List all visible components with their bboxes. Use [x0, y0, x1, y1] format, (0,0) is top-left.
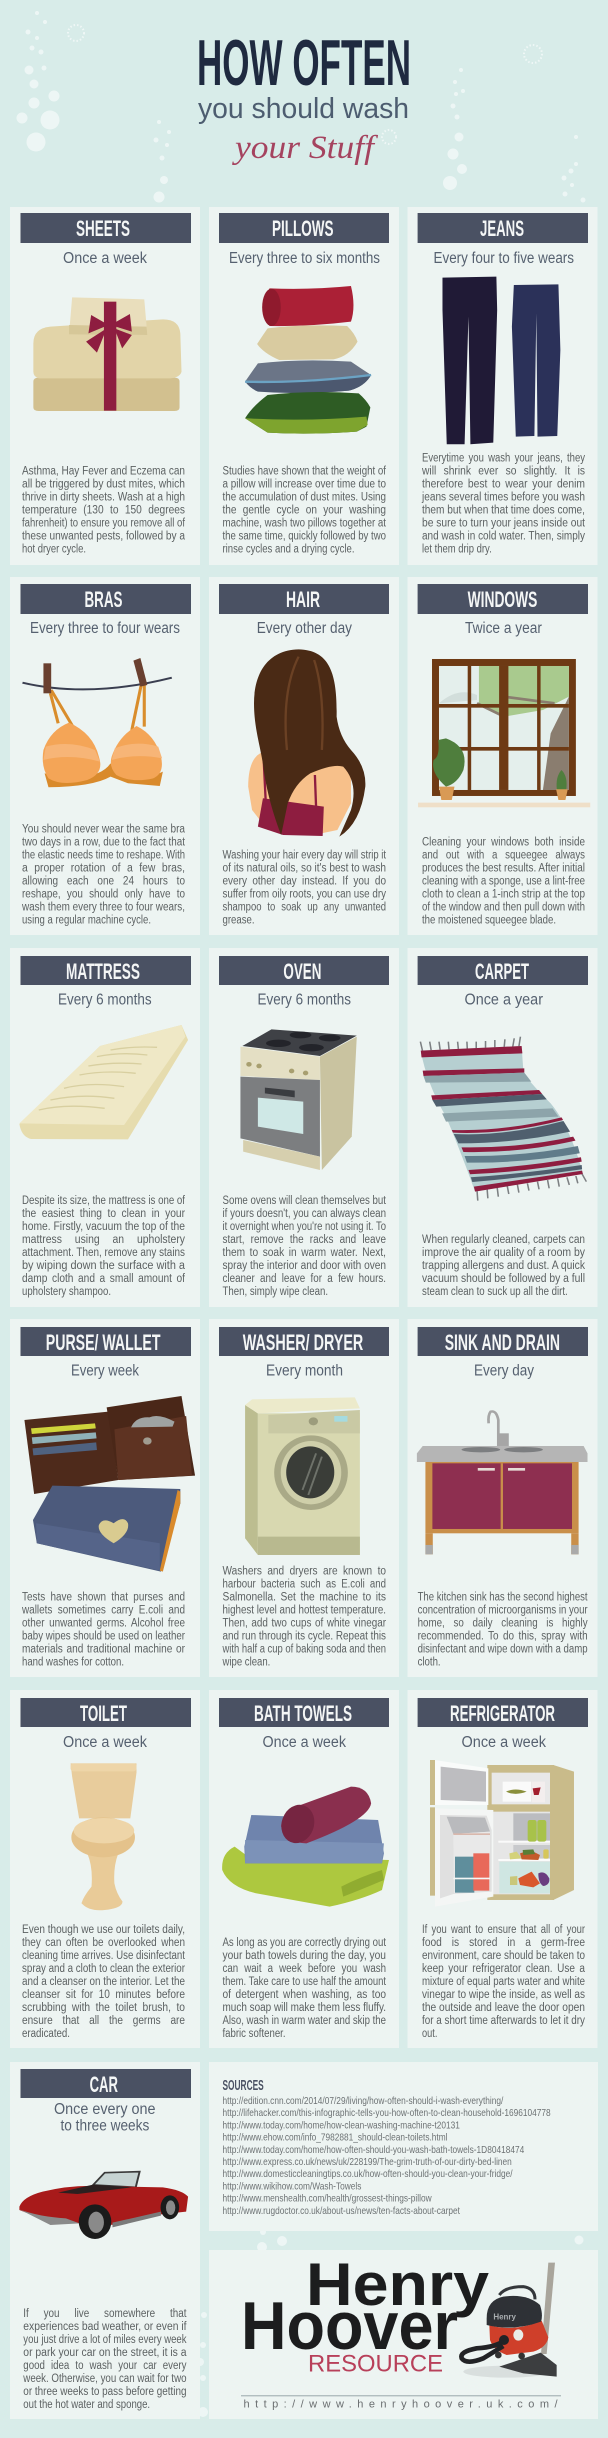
body text: oven: it overnight when you're not using it. To [222, 1221, 386, 1233]
heading: sources: SOURCES [222, 2078, 264, 2094]
body text: toilet: and a cleanser on the interior. Let the [22, 1976, 185, 1988]
header: windows [418, 584, 588, 614]
body text: oven: Then, simply wipe clean. [222, 1286, 328, 1298]
icon: toilet [71, 1763, 137, 1910]
body text: car [22, 2308, 187, 2411]
icon: stacked towels [222, 1787, 389, 1907]
panel: hair [209, 577, 399, 935]
body text: sheets: thrive in dirty sheets. Wash at a high [22, 492, 185, 504]
source list: http://www.menshealth.com/health/grossest-things-pillow [222, 2194, 432, 2205]
source list: http://www.domesticcleaningtips.co.uk/how-often-should-you-clean-your-fridge/ [222, 2169, 513, 2180]
source list: http://www.today.com/home/how-often-should-you-wash-bath-towels-1D80418474 [222, 2145, 524, 2156]
panel: jeans [408, 207, 598, 565]
body text: carpet: When regularly cleaned, carpets can [422, 1234, 585, 1246]
frequency: oven: Every 6 months [258, 992, 351, 1009]
icon: jeans [442, 277, 560, 444]
header: toilet: TOILET [80, 1701, 127, 1726]
body text: oven: cleaner and leave for a few hours. [222, 1273, 386, 1285]
body text: washer and dryer: and run through its cycle. Repeat this [222, 1630, 386, 1642]
panel: bath towels [209, 1690, 399, 2048]
icon: woman with long hair [248, 649, 365, 837]
header: washer and dryer: WASHER/ DRYER [243, 1330, 363, 1355]
body text: bras: using a regular machine cycle. [22, 914, 151, 926]
body text: bras: two days in a row, due to the fact that [22, 836, 186, 848]
body text: pillows: the gentle cycle on your washing [222, 505, 386, 517]
body text: car: experiences bad weather, or even if [23, 2321, 187, 2333]
header: sink and drain [418, 1327, 588, 1356]
body text: purse and wallet: hand washes for cotton. [22, 1656, 124, 1668]
body text: jeans: be sure to turn your jeans inside out [422, 518, 586, 530]
body text: bras: wash them every three to four wears, [21, 902, 185, 914]
frequency: bath towels: Once a week [262, 1734, 346, 1751]
body text: bath towels [222, 1937, 387, 2040]
body text: oven [222, 1195, 387, 1298]
body text: sheets: these unwanted pests, followed by a [22, 531, 186, 543]
frequency: bras: Every three to four wears [30, 620, 180, 637]
body text: mattress: attachment. Then, remove any stains [22, 1247, 185, 1259]
body text: jeans [421, 453, 586, 556]
body text: sheets: temperature (130 to 150 degrees [22, 505, 185, 517]
header: hair [219, 584, 389, 614]
header: bras [20, 584, 191, 614]
body text: toilet: eradicated. [22, 2028, 70, 2040]
icon: bra on line [22, 658, 172, 787]
header: carpet: CARPET [475, 959, 529, 984]
header: mattress [20, 956, 191, 985]
header: bras: BRAS [84, 587, 122, 612]
body text: jeans: let them drip dry. [422, 544, 492, 556]
body text: hair: of its natural oils, so it's best to wash [222, 862, 386, 874]
body text: purse and wallet: wallets sometimes carry E.coli and [21, 1604, 185, 1616]
body text: sheets: fahrenheit) to ensure you remove all of [22, 518, 186, 530]
body text: sheets [22, 466, 186, 556]
panel: refrigerator [408, 1690, 598, 2048]
body text: mattress: by wiping down the surface with a [22, 1260, 186, 1272]
body text: hair: every other day instead. If you do [222, 876, 386, 888]
body text: sink and drain [418, 1592, 588, 1668]
body text: bras: a proper rotation of a few bras, [22, 862, 185, 874]
body text: refrigerator: keep your refrigerator clean. Use a [422, 1963, 586, 1975]
header: refrigerator [418, 1698, 588, 1727]
body text: toilet: cleaning time arrives. Use disinfectant [22, 1950, 186, 1962]
body text: refrigerator: for a short time afterwards to let it dry [422, 2015, 585, 2027]
body text: pillows: the accumulation of dust mites. Using [222, 492, 386, 504]
body text: sheets: all be triggered by dust mites, which [22, 479, 185, 491]
body text: washer and dryer: wipe clean. [222, 1656, 270, 1668]
body text: car: If you live somewhere that [23, 2308, 187, 2320]
icon: red convertible [19, 2172, 188, 2239]
body text: bras: allowing each one 24 hours to [22, 876, 185, 888]
body text: washer and dryer [222, 1566, 386, 1668]
body text: carpet: steam clean to suck up all the dirt. [422, 1286, 568, 1298]
body text: refrigerator [422, 1924, 586, 2040]
body text: bath towels: your bath towels during the day, you [222, 1950, 386, 1962]
source list: http://www.express.co.uk/news/uk/228199/The-grim-truth-of-our-dirty-bed-linen [222, 2157, 512, 2168]
body text: carpet [422, 1234, 585, 1298]
body text: mattress: mattress using an upholstery [22, 1234, 185, 1246]
body text: carpet: improve the air quality of a room by [422, 1247, 585, 1259]
icon: oven [240, 1029, 357, 1170]
icon: wallet and purse [24, 1396, 195, 1572]
frequency: jeans: Every four to five wears [434, 250, 574, 267]
body text: mattress: damp cloth and a small amount of [22, 1273, 186, 1285]
header: purse and wallet [20, 1327, 191, 1356]
header: bath towels: BATH TOWELS [254, 1701, 352, 1726]
header: jeans: JEANS [480, 216, 524, 241]
body text: toilet: cleanser sit for 10 minutes before [22, 1989, 185, 2001]
source list: http://www.rugdoctor.co.uk/about-us/news/ten-facts-about-carpet [222, 2206, 460, 2217]
body text: windows: cloth to clean a 1-inch strip at the top [422, 888, 585, 900]
header: bath towels [219, 1698, 389, 1727]
header: car: CAR [90, 2072, 118, 2097]
body text: bath towels: fabric softener. [222, 2028, 286, 2040]
logo wordmark: RESOURCE [308, 2351, 443, 2378]
header: oven [219, 956, 389, 985]
body text: bath towels: much soap will make them less fluffy. [222, 2002, 386, 2014]
body text: bras: You should never wear the same bra [22, 824, 186, 836]
header: purse and wallet: PURSE/ WALLET [46, 1330, 161, 1355]
body text: pillows: a pillow will increase over time due to [222, 479, 386, 491]
body text: toilet: Even though we use our toilets daily, [22, 1924, 185, 1936]
body text: car: good idea to wash your car every [23, 2360, 187, 2372]
body text: windows: produces the best results. After initial [422, 862, 585, 874]
body text: bras: reshape, you should only have to [22, 888, 185, 900]
body text: oven: start, remove the racks and leave [222, 1234, 386, 1246]
body text: purse and wallet: Tests have shown that purses and [22, 1592, 185, 1604]
frequency: mattress: Every 6 months [58, 992, 152, 1009]
logo wordmark: Hoover [241, 2288, 458, 2364]
logo wordmark: Henry [306, 2250, 489, 2318]
panel: car [10, 2062, 200, 2419]
source list: http://www.ehow.com/info_7982881_should-clean-toilets.html [222, 2133, 448, 2144]
frequency: refrigerator: Once a week [462, 1734, 546, 1751]
body text: sheets: hot dryer cycle. [22, 544, 86, 556]
body text: pillows [222, 466, 387, 556]
frequency: car: to three weeks [60, 2118, 150, 2135]
header: sheets [20, 213, 191, 243]
frequency: hair: Every other day [257, 620, 352, 637]
body text: toilet: they can often be overlooked when [22, 1937, 185, 1949]
body text: toilet: scrubbing with the toilet brush, to [22, 2002, 185, 2014]
panel: pillows [209, 207, 399, 565]
frequency: sink and drain: Every day [474, 1363, 534, 1380]
panel: sheets [10, 207, 200, 565]
header: hair: HAIR [286, 587, 320, 612]
body text: jeans: and wash in cold water. Then, simply [422, 531, 585, 543]
body text: purse and wallet: materials and traditional machine or [22, 1644, 185, 1656]
frequency: sheets: Once a week [63, 250, 147, 267]
body text: refrigerator: food is stored in a germ-free [422, 1937, 585, 1949]
body text: jeans: will shrink ever so slightly. It is [421, 466, 585, 478]
body text: car: or three weeks to pass before getting [23, 2386, 186, 2398]
panel: windows [408, 577, 598, 935]
body text: windows [422, 836, 585, 926]
body text: oven: them to soak in warm water. Next, [222, 1247, 386, 1259]
logo wordmark [241, 2250, 489, 2378]
body text: mattress: the easiest thing to clean in your [22, 1208, 185, 1220]
frequency: carpet: Once a year [464, 992, 543, 1009]
header: sheets: SHEETS [76, 216, 130, 241]
subheading: you should wash: you should wash [198, 93, 409, 125]
source list: http://www.today.com/home/how-clean-washing-machine-t20131 [222, 2120, 460, 2131]
frequency: car [54, 2101, 156, 2135]
body text: mattress: upholstery shampoo. [22, 1286, 111, 1298]
body text: hair [222, 850, 387, 926]
source list: http://www.wikihow.com/Wash-Towels [222, 2181, 361, 2192]
icon: henry vacuum: Henry [493, 2311, 516, 2321]
body text: washer and dryer: harbour bacteria such as E.coli and [222, 1578, 386, 1590]
body text: jeans: therefore best to wear your denim [422, 479, 585, 491]
frequency: pillows: Every three to six months [229, 250, 380, 267]
body text: refrigerator: environment, care should be taken to [422, 1950, 585, 1962]
body text: pillows: rinse cycles and a drying cycle. [222, 544, 354, 556]
icon: mattress [19, 1025, 188, 1139]
frequency: washer and dryer: Every month [266, 1363, 343, 1380]
frequency: toilet: Once a week [63, 1734, 147, 1751]
panel: bras [10, 577, 200, 935]
body text: hair: Washing your hair every day will strip it [222, 850, 387, 862]
body text: sheets: Asthma, Hay Fever and Eczema can [22, 466, 185, 478]
icon: henry vacuum [461, 2263, 557, 2378]
icon: open refrigerator [430, 1760, 574, 1907]
icon: washing machine [245, 1397, 360, 1555]
body text: bras: the elastic needs time to reshape. With [22, 850, 185, 862]
body text: washer and dryer: with half a cup of baking soda and then [222, 1644, 386, 1656]
panel: oven [209, 948, 399, 1307]
panel: purse and wallet [10, 1319, 200, 1677]
body text: pillows: machine, wash two pillows together at [222, 518, 387, 530]
header: mattress: MATTRESS [66, 959, 140, 984]
url line: http://www.henryhoover.uk.com/ [244, 2399, 558, 2411]
heading: how often: HOW OFTEN [197, 26, 411, 99]
header: oven: OVEN [283, 959, 321, 984]
panel: sources [209, 2062, 598, 2231]
frequency: purse and wallet: Every week [71, 1363, 139, 1380]
body text: bath towels: As long as you are correctly drying out [222, 1937, 387, 1949]
body text: bras [21, 824, 186, 926]
header: washer and dryer [219, 1327, 389, 1356]
icon: window with plants [418, 659, 590, 807]
body text: hair: grease. [222, 914, 254, 926]
body text: washer and dryer: Washers and dryers are known to [222, 1566, 386, 1578]
body text: mattress: home. Firstly, vacuum the top of the [22, 1221, 185, 1233]
body text: oven: if yours doesn't, you can always clean [222, 1208, 386, 1220]
body text: bath towels: of detergent when washing, as too [222, 1989, 386, 2001]
header: car [20, 2069, 191, 2098]
panel: mattress [10, 948, 200, 1307]
icon: folded sheets [33, 297, 181, 411]
body text: washer and dryer: Then, add two cups of white vinegar [222, 1618, 386, 1630]
header: windows: WINDOWS [468, 587, 537, 612]
frequency: windows: Twice a year [465, 620, 542, 637]
panel: washer and dryer [209, 1319, 399, 1677]
subheading: your stuff: your Stuff [232, 130, 378, 166]
body text: refrigerator: the outside and leave the door open [422, 2002, 585, 2014]
body text: bath towels: can wait a week before you wash [222, 1963, 386, 1975]
body text: pillows: Studies have shown that the weight of [222, 466, 387, 478]
body text: bath towels: Also, wash in warm water and skip the [222, 2015, 386, 2027]
body text: jeans: jeans several times before you wash [421, 492, 585, 504]
panel: sink and drain [408, 1319, 598, 1677]
panel: henry hoover logo [209, 2250, 598, 2419]
body text: purse and wallet: baby wipes should be used on leather [22, 1630, 185, 1642]
body text: hair: shampoo to soak up any unwanted [222, 902, 386, 914]
body text: oven: spray the interior and door with oven [222, 1260, 386, 1272]
frequency: car: Once every one [54, 2101, 156, 2118]
body text: oven: Some ovens will clean themselves but [222, 1195, 387, 1207]
body text: pillows: the same time, quickly followed by two [222, 531, 386, 543]
body text: washer and dryer: highest level and hottest temperature. [222, 1604, 386, 1616]
header: pillows [219, 213, 389, 243]
body text: toilet: ensure that all the germs are [22, 2015, 185, 2027]
icon: pillow stack [245, 286, 371, 434]
header: pillows: PILLOWS [272, 216, 334, 241]
header: toilet [20, 1698, 191, 1727]
panel: toilet [10, 1690, 200, 2048]
body text: jeans: them but when that time does come, [422, 505, 585, 517]
title [197, 26, 411, 166]
body text: toilet [22, 1924, 186, 2040]
body text: windows: the moistened squeegee blade. [422, 914, 556, 926]
body text: hair: suffer from oily roots, you can use dry [222, 888, 386, 900]
source list [222, 2096, 551, 2217]
body text: mattress [22, 1195, 186, 1298]
body text: car: out the hot water and sponge. [23, 2399, 150, 2411]
body text: carpet: trapping allergens and dust. A quick [422, 1260, 585, 1272]
panel: carpet [408, 948, 598, 1307]
header: carpet [418, 956, 588, 985]
body text: carpet: vacuum should be followed by a full [422, 1273, 585, 1285]
source list: http://edition.cnn.com/2014/07/29/living/how-often-should-i-wash-everything/ [222, 2096, 503, 2107]
body text: washer and dryer: Salmonella. Set the machine to its [222, 1592, 386, 1604]
body text: refrigerator: vinegar to wipe the inside, as well as [422, 1989, 585, 2001]
body text: purse and wallet: other unwanted germs. Alcohol free [22, 1618, 185, 1630]
body text: toilet: spray and a cloth to clean the exterior [22, 1963, 185, 1975]
body text: refrigerator: out. [422, 2028, 437, 2040]
body text: purse and wallet [21, 1592, 185, 1668]
icon: sink cabinet [417, 1411, 588, 1554]
body text: car: you just drive a lot of miles every week [23, 2334, 187, 2346]
header: jeans [418, 213, 588, 243]
body text: car: or park your car on the street, it is a [23, 2347, 187, 2359]
body text: car: week. Otherwise, you can wait for two [22, 2373, 186, 2385]
body text: windows: Cleaning your windows both inside [422, 836, 585, 848]
body text: mattress: Despite its size, the mattress is one of [22, 1195, 186, 1207]
icon: striped carpet [420, 1037, 586, 1201]
body text: bath towels: them. Take care to use half the amount [222, 1976, 387, 1988]
body text: sink and drain: cloth. [418, 1656, 441, 1668]
